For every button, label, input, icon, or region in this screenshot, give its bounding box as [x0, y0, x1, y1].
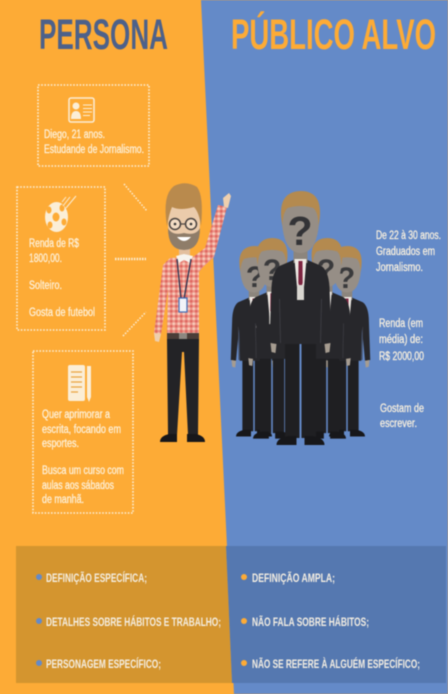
text: goals: esportes. [42, 438, 79, 450]
panel: income and hobbies [17, 187, 105, 330]
text: goals: aulas aos sábados [42, 480, 114, 492]
text: name and occupation: Estudande de Jornalismo. [44, 144, 144, 156]
title: persona: PERSONA [39, 11, 168, 59]
list item: specific character [36, 656, 161, 671]
panel: goals [33, 351, 133, 513]
list item: no habits: NÃO FALA SOBRE HÁBITOS; [252, 614, 369, 629]
man: middle left: ? [263, 254, 281, 287]
panel: persona characteristics [16, 546, 232, 683]
text: goals: Busca um curso com [42, 465, 124, 477]
text: name and occupation: Diego, 21 anos. [44, 129, 105, 141]
icon: soccer ball [45, 196, 76, 232]
list item: broad definition: DEFINIÇÃO AMPLA; [252, 570, 335, 585]
list item: specific definition: DEFINIÇÃO ESPECÍFICA; [46, 570, 147, 585]
text: interests: Gostam de [380, 403, 424, 415]
list item: specific character: PERSONAGEM ESPECÍFICO; [46, 656, 161, 671]
text: income and hobbies: Renda de R$ [29, 238, 79, 250]
text: goals: escrita, focando em [42, 424, 121, 436]
man: center front: ? [287, 208, 313, 254]
background: blue target audience side [201, 0, 448, 694]
list item: no habits [241, 614, 369, 629]
icon: notepad and pen [68, 365, 91, 402]
text: average income: média) de: [379, 334, 423, 346]
connectors: dotted lines to persona [115, 184, 147, 336]
text: age and education: Jornalismo. [376, 262, 423, 274]
illustration: persona man with raised arm [154, 183, 231, 442]
illustration: group of anonymous men [231, 191, 370, 445]
man: far left: ? [246, 261, 264, 294]
list item: habits and work: DETALHES SOBRE HÁBITOS E TRABALHO; [46, 614, 221, 629]
panel: identity card [38, 85, 149, 166]
icon: id card [69, 98, 94, 122]
text: income and hobbies: Solteiro. [29, 280, 62, 292]
man: far left [231, 246, 277, 436]
text: interests: escrever. [380, 418, 417, 430]
text: goals: Quer aprimorar a [42, 409, 110, 421]
text: income and hobbies: Gosta de futebol [29, 307, 95, 319]
text: goals: de manhã. [42, 494, 84, 506]
man: center front [270, 191, 332, 445]
list item: habits and work [36, 614, 221, 629]
text: average income: Renda (em [379, 318, 423, 330]
text: average income: R$ 2000,00 [379, 351, 424, 363]
list item: broad definition [241, 570, 335, 585]
man: middle left [248, 238, 296, 439]
text: income and hobbies: 1800,00. [29, 253, 62, 265]
man: far right [324, 246, 370, 436]
man: far right: ? [337, 262, 355, 295]
man: middle right [303, 238, 351, 439]
man: middle right: ? [317, 254, 335, 287]
panel: target audience characteristics [226, 546, 446, 683]
list item: specific definition [36, 570, 147, 585]
